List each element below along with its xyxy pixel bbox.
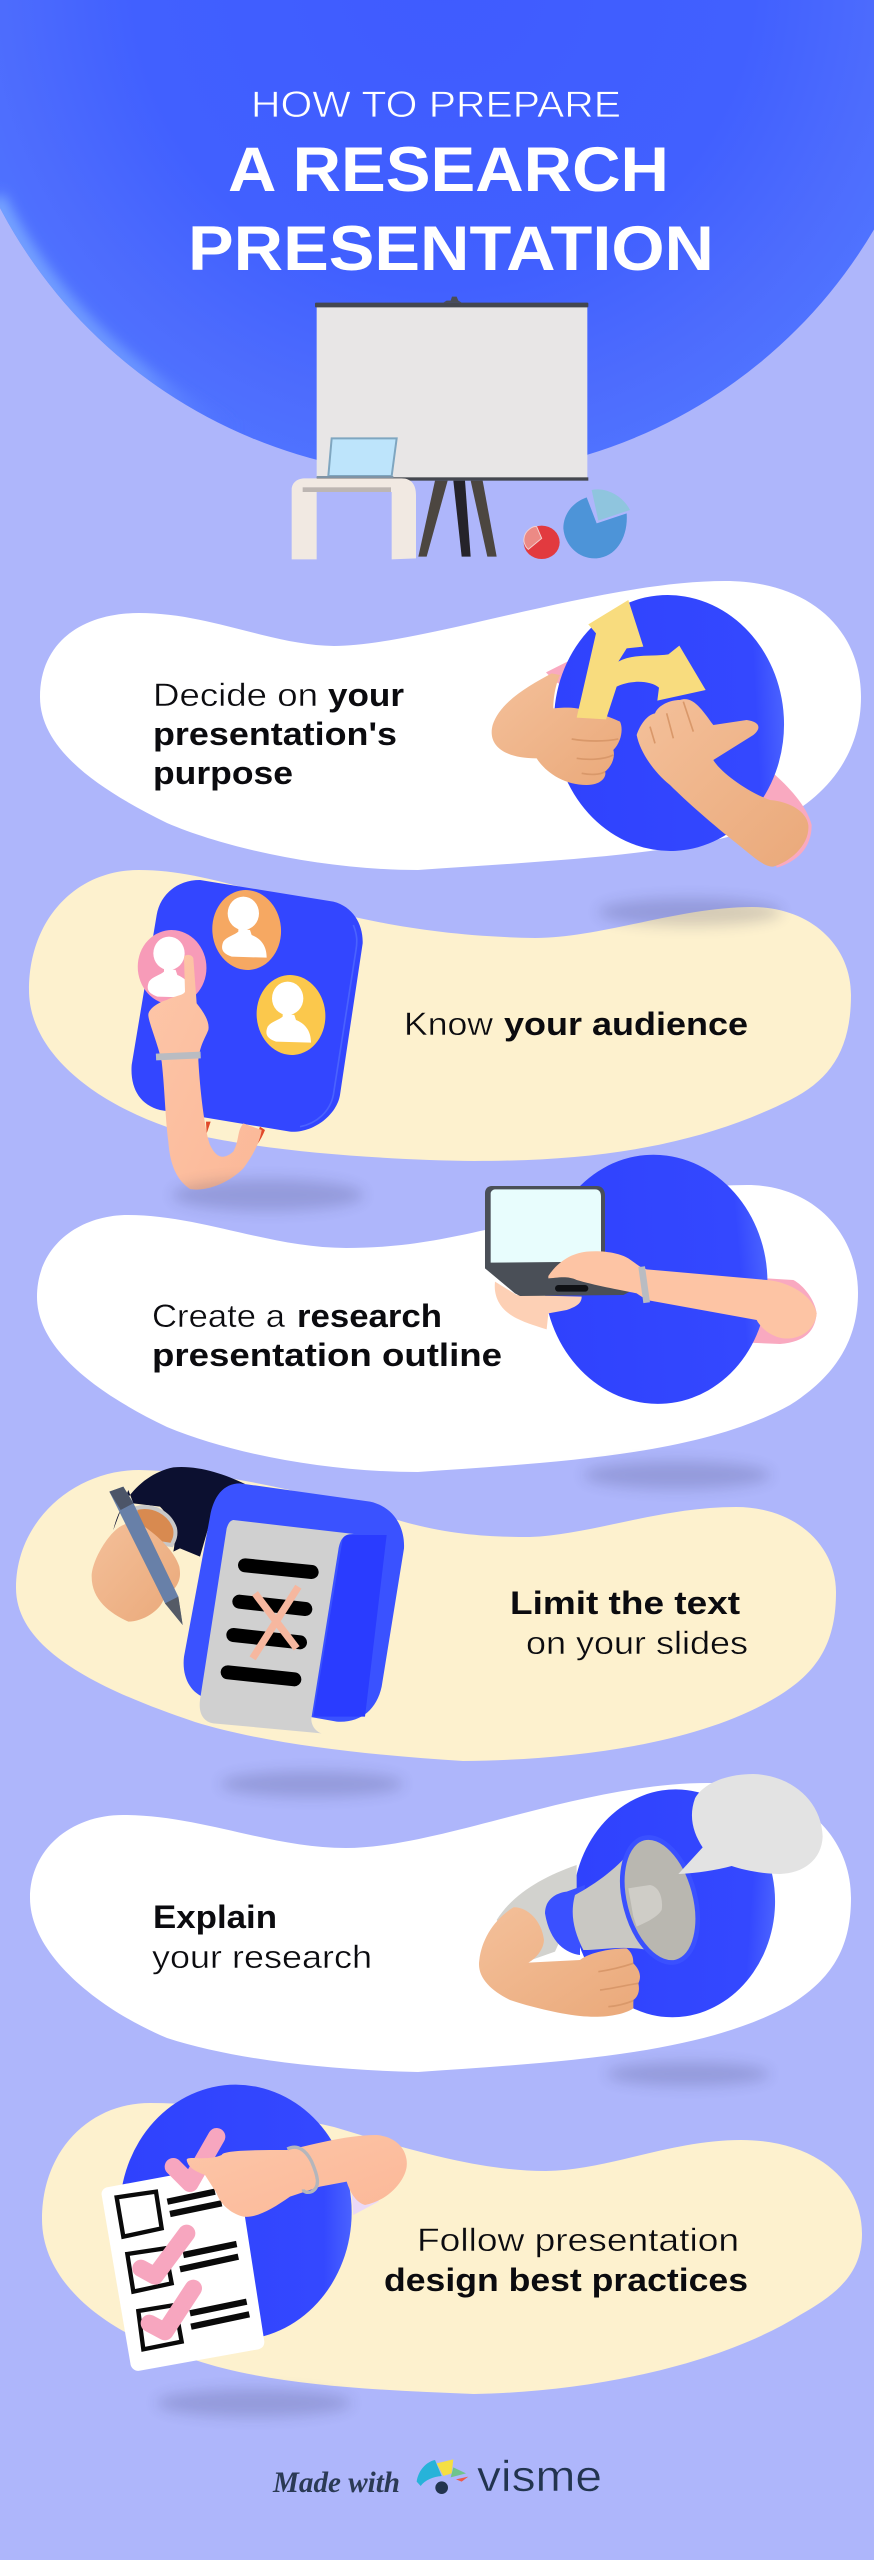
shadow under step 2 illustration [172,1179,364,1211]
illustration: hands on laptop [485,1145,817,1413]
footer: made with visme [272,2452,602,2501]
text: step 6: design best practices [384,2262,748,2298]
illustration: megaphone [479,1774,823,2024]
blob: white [30,1783,851,2072]
blob: cream [29,870,851,1161]
panel 6: best practices [42,2062,862,2417]
title: PRESENTATION [188,214,714,284]
illustration: checklist [102,2085,407,2371]
panel 3: outline [37,1145,858,1472]
shadow under step 4 illustration [220,1771,404,1797]
text: step 3: research [297,1298,442,1334]
made with text: Made with [272,2466,400,2499]
text: step 3: presentation outline [152,1337,502,1373]
checkboxes [117,2192,182,2349]
shadow under step 3 illustration [583,1461,771,1489]
illustration: table and laptop [292,438,416,559]
text: step 4: Limit the text [510,1585,740,1621]
text: step 1: your [328,677,404,713]
panel 2: audience [29,870,851,1190]
document text bars [228,1565,312,1679]
icon: yellow person [253,972,329,1058]
text: step 2 [404,1006,748,1042]
icon: visme logo [417,2459,468,2494]
text: step 4 [510,1585,748,1661]
text: step 6 [384,2222,748,2298]
title [188,84,714,284]
text: step 3: Create a [152,1298,285,1334]
blob: cream [16,1470,836,1761]
blob: white [40,581,861,870]
text: step 3 [152,1298,502,1373]
blob: white [37,1185,858,1472]
illustration: writing on document [92,1467,404,1733]
panel 1: purpose [40,581,861,870]
text: step 2: Know [404,1006,494,1042]
blob: cream [42,2103,862,2394]
shadow under step 6 illustration [156,2389,352,2417]
text: step 1: Decide on [153,677,318,713]
header blue circle [0,0,874,476]
icon: speech bubble [678,1774,823,1874]
illustration: audience tablet [131,880,363,1190]
checklist lines [167,2192,249,2327]
shadow under step 5 illustration [606,2062,770,2086]
illustration: projection screen [315,297,588,557]
text: step 4: on your slides [526,1625,748,1661]
text: step 1 [153,677,404,791]
text: step 5: your research [152,1939,372,1975]
text: step 2: your audience [504,1006,748,1042]
visme wordmark: visme [477,2452,602,2501]
text: step 1: presentation's [153,716,397,752]
illustration: pie charts [524,489,630,559]
pink check marks [141,2137,217,2332]
header circle highlight [0,191,192,408]
title: A RESEARCH [228,135,669,205]
title: HOW TO PREPARE [251,84,621,125]
pink cross [253,1587,298,1658]
icon: orange person [209,887,284,973]
illustration: hands with arrow [492,589,812,868]
text: step 5 [152,1899,372,1975]
panel 4: limit text [16,1461,836,1761]
text: step 5: Explain [153,1899,277,1935]
text: step 6: Follow presentation [417,2222,739,2258]
icon: pink person [135,927,210,1008]
header [0,0,874,559]
text: step 1: purpose [153,755,293,791]
shadow under step 1 illustration [598,898,782,926]
panel 5: explain [30,1771,851,2072]
